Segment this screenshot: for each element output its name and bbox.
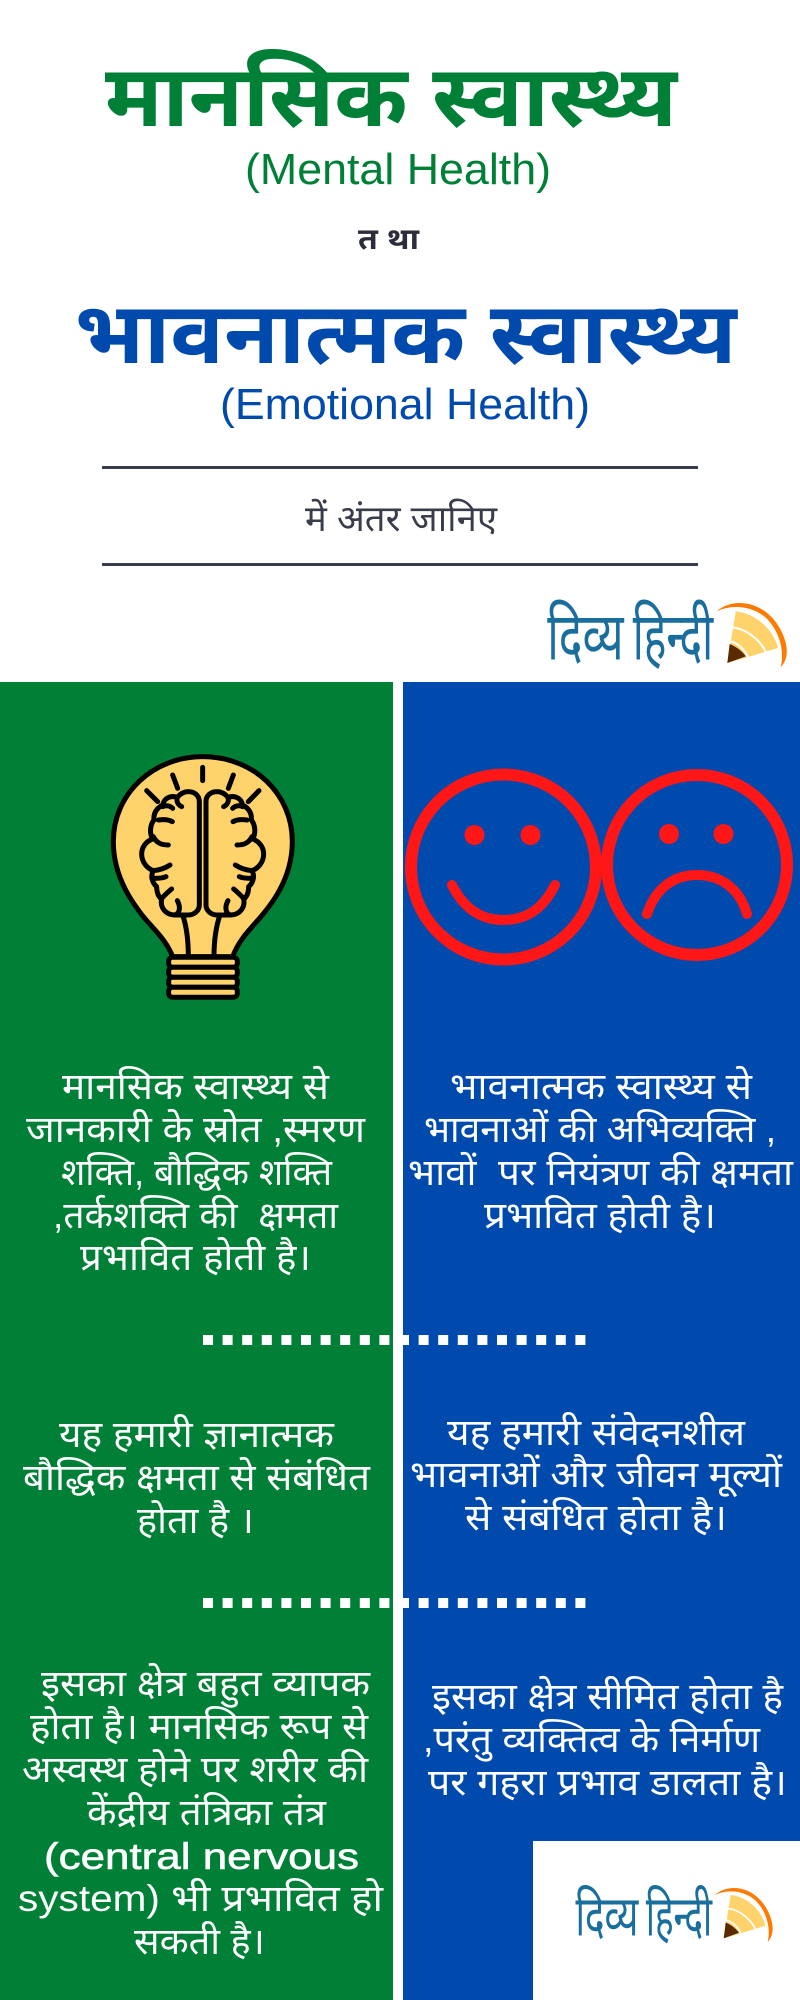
text: emotional health point 2: भावनाओं और जीवन मूल्यों [410, 1453, 783, 1497]
logo: top: हिन्दी [633, 599, 714, 675]
logo: top: दिव्य [547, 599, 624, 675]
title: mental health: मानसिक स्वास्थ्य [105, 48, 678, 145]
text: mental health point 3: होता है। मानसिक रूप से [30, 1706, 369, 1747]
text: emotional health point 3: पर गहरा प्रभाव डालता है। [428, 1762, 787, 1803]
icon: sad face [607, 775, 787, 955]
text: mental health point 3: सकती है। [134, 1921, 265, 1962]
text: emotional health point 1: भावों पर नियंत्रण की क्षमता [408, 1151, 794, 1193]
text: mental health point 2 [23, 1414, 371, 1541]
icon: happy face [411, 774, 596, 960]
text: emotional health point 1 [408, 1066, 794, 1236]
text: mental health point 2: यह हमारी ज्ञानात्मक [59, 1414, 335, 1455]
text: mental health point 1 [26, 1066, 366, 1278]
title: emotional health [74, 286, 738, 429]
text: mental health point 2: होता है । [137, 1500, 254, 1541]
text: mental health point 3: system) भी प्रभावित हो [18, 1878, 385, 1919]
text: mental health point 3 [18, 1663, 385, 1962]
icon: light bulb with brain [113, 757, 292, 997]
logo panel: bottom: दिव्य [576, 1884, 639, 1948]
connector word: त था [358, 223, 420, 256]
title: emotional health: (Emotional Health) [220, 380, 590, 429]
text: mental health point 1: मानसिक स्वास्थ्य से [62, 1066, 330, 1107]
title: mental health: (Mental Health) [245, 145, 551, 194]
text: mental health point 3: (central nervous [44, 1836, 359, 1877]
panel: mental health [0, 682, 393, 2000]
text: mental health point 1: ,तर्कशक्ति की क्षमता [53, 1194, 339, 1236]
logo panel: bottom [533, 1841, 800, 2000]
text: emotional health point 2: से संबंधित होता है। [465, 1497, 727, 1538]
text: emotional health point 3: इसका क्षेत्र सीमित होता है [432, 1676, 784, 1717]
text: mental health point 1: जानकारी के स्रोत ,स्मरण [26, 1109, 366, 1150]
text: mental health point 3: अस्वस्थ होने पर शरीर की [22, 1748, 369, 1790]
text: emotional health point 1: भावनात्मक स्वास्थ्य से [450, 1066, 753, 1107]
text: mental health point 3: केंद्रीय तंत्रिका तंत्र [87, 1791, 327, 1833]
panel: emotional health [403, 682, 800, 2000]
text: mental health point 1: शक्ति, बौद्धिक शक्ति [61, 1152, 333, 1193]
text: mental health point 1: प्रभावित होती है। [80, 1237, 311, 1278]
text: emotional health point 2 [410, 1412, 783, 1538]
text: emotional health point 3 [423, 1676, 787, 1803]
subtitle: में अंतर जानिए [305, 498, 498, 539]
title: emotional health: भावनात्मक स्वास्थ्य [74, 286, 738, 382]
text: emotional health point 3: ,परंतु व्यक्तित्व के निर्माण [423, 1718, 761, 1762]
title: mental health [105, 48, 678, 194]
text: mental health point 2: बौद्धिक क्षमता से संबंधित [23, 1457, 371, 1498]
logo: top [547, 599, 787, 675]
text: emotional health point 1: प्रभावित होती है। [484, 1195, 716, 1236]
text: mental health point 3: इसका क्षेत्र बहुत व्यापक [41, 1663, 371, 1708]
text: emotional health point 2: यह हमारी संवेदनशील [447, 1412, 746, 1453]
logo panel: bottom: हिन्दी [646, 1884, 713, 1948]
text: emotional health point 1: भावनाओं की अभिव्यक्ति , [424, 1108, 776, 1150]
